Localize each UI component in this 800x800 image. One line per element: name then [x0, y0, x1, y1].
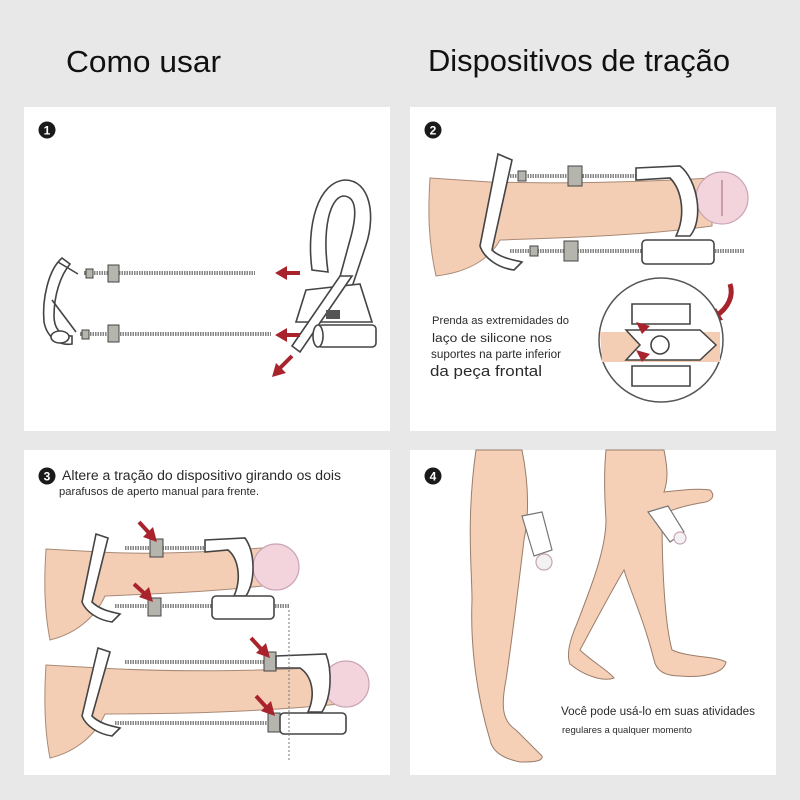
step number 2 — [424, 122, 442, 138]
standing figure legs — [470, 450, 542, 762]
upper assembly — [45, 534, 299, 640]
assembled device on shaft — [429, 154, 748, 276]
instruction text — [430, 315, 569, 380]
arrow: upper rod — [275, 266, 300, 280]
step number 1: 1 — [44, 124, 51, 138]
curved arrow — [708, 284, 731, 322]
device on walking figure — [648, 506, 686, 544]
instruction text — [59, 468, 341, 498]
instruction text: Altere a tração do dispositivo girando os dois — [62, 468, 341, 483]
silicone loop and front piece — [292, 180, 376, 352]
caption: regulares a qualquer momento — [562, 725, 692, 736]
title: Como usar: Como usar — [66, 44, 221, 79]
caption: Você pode usá-lo em suas atividades — [561, 706, 755, 718]
dotted guide — [288, 610, 290, 760]
panel: step 1 — [24, 107, 390, 431]
instruction text: parafusos de aperto manual para frente. — [59, 486, 259, 498]
instruction text: laço de silicone nos — [432, 333, 552, 345]
step number 1 — [38, 122, 56, 138]
panel: step 3 — [24, 450, 390, 775]
step number 4 — [424, 468, 442, 484]
caption — [561, 706, 755, 736]
instruction text: suportes na parte inferior — [431, 349, 561, 361]
circular detail — [599, 278, 723, 402]
instruction text: da peça frontal — [430, 363, 542, 380]
title: Dispositivos de tração: Dispositivos de tração — [428, 43, 730, 78]
device frame with rods — [44, 258, 271, 344]
panel: step 2 — [410, 107, 776, 431]
step number 2: 2 — [430, 124, 437, 138]
lower assembly — [45, 648, 369, 758]
panel: step 4 — [410, 450, 776, 775]
device on standing figure — [522, 512, 552, 570]
arrows — [134, 522, 275, 716]
instruction text: Prenda as extremidades do — [432, 315, 569, 327]
walking figure legs — [568, 450, 726, 679]
arrow: loop end — [272, 356, 292, 377]
arrow: lower rod — [275, 328, 300, 342]
step number 3 — [38, 468, 56, 484]
step number 3: 3 — [44, 470, 51, 484]
step number 4: 4 — [430, 470, 437, 484]
